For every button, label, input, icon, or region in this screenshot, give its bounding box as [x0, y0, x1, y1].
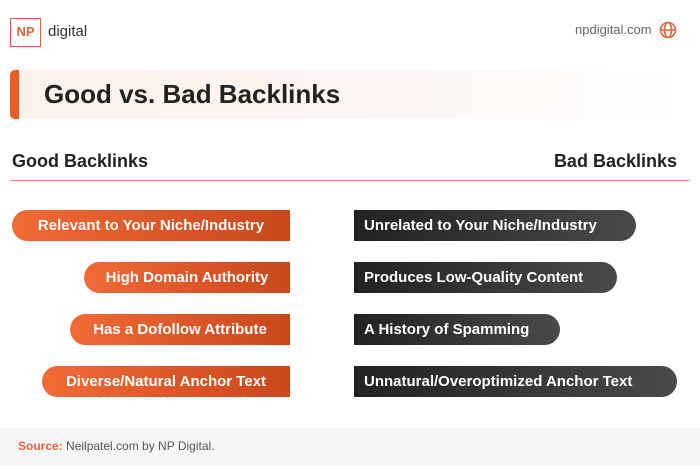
bad item 4: Unnatural/Overoptimized Anchor Text	[364, 373, 632, 390]
bad item 4	[354, 366, 677, 397]
good item 1	[12, 210, 290, 241]
logo: NP	[16, 24, 35, 39]
good item 4: Diverse/Natural Anchor Text	[66, 373, 266, 390]
good item 3: Has a Dofollow Attribute	[93, 321, 267, 338]
bad list	[354, 210, 677, 397]
title band	[10, 70, 690, 119]
footer source: Source: Neilpatel.com by NP Digital.	[18, 439, 215, 453]
bad item 2	[354, 262, 617, 293]
good item 2: High Domain Authority	[106, 269, 268, 286]
website url: npdigital.com	[575, 22, 652, 37]
heading: bad: Bad Backlinks	[554, 151, 677, 171]
heading: good: Good Backlinks	[12, 151, 148, 171]
good list	[12, 210, 290, 397]
good item 3	[70, 314, 290, 345]
logo: digital	[48, 23, 87, 40]
footer source	[0, 428, 700, 465]
good item 4	[42, 366, 290, 397]
bad item 1	[354, 210, 636, 241]
good item 1: Relevant to Your Niche/Industry	[38, 217, 264, 234]
good item 2	[84, 262, 290, 293]
bad item 3: A History of Spamming	[364, 321, 529, 338]
bad item 2: Produces Low-Quality Content	[364, 269, 583, 286]
bad item 3	[354, 314, 560, 345]
bad item 1: Unrelated to Your Niche/Industry	[364, 217, 597, 234]
title band: Good vs. Bad Backlinks	[44, 79, 340, 109]
logo	[10, 18, 87, 47]
icon: globe	[660, 22, 676, 38]
